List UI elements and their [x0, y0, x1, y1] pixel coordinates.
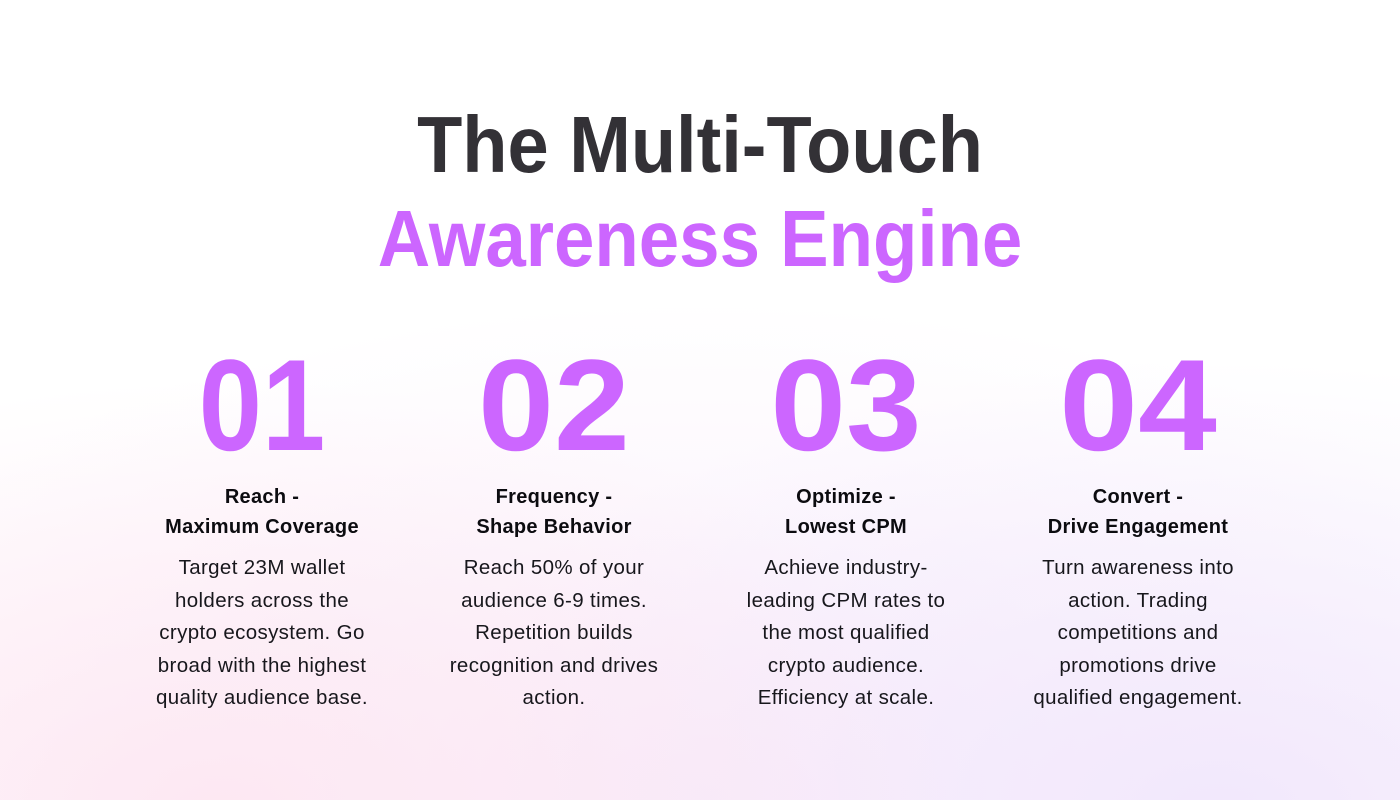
body 02: Repetition builds [475, 621, 633, 644]
heading 04 [1048, 486, 1228, 538]
title line 2: Awareness Engine [378, 194, 1022, 283]
heading 03: Lowest CPM [785, 516, 907, 538]
heading 02 [476, 486, 632, 538]
body 04: action. Trading [1068, 589, 1208, 612]
number 03: 03 [770, 332, 922, 478]
heading 04: Drive Engagement [1048, 516, 1228, 538]
column 03 [747, 332, 945, 709]
column 04 [1033, 332, 1243, 709]
heading 04: Convert - [1093, 486, 1183, 508]
body 02: Reach 50% of your [464, 556, 644, 579]
body 03: crypto audience. [768, 654, 924, 677]
body 02: recognition and drives [450, 654, 658, 677]
body 04: competitions and [1058, 621, 1218, 644]
title [378, 100, 1022, 283]
heading 03: Optimize - [796, 486, 896, 508]
heading 02: Shape Behavior [476, 516, 632, 538]
body 03: leading CPM rates to [747, 589, 945, 612]
heading 01 [165, 486, 359, 538]
body 01: quality audience base. [156, 686, 368, 709]
number 02: 02 [478, 332, 630, 478]
body 01: holders across the [175, 589, 349, 612]
heading 01: Maximum Coverage [165, 516, 359, 538]
body 03: Achieve industry- [764, 556, 928, 579]
body 04 [1033, 556, 1243, 709]
title line 1: The Multi-Touch [417, 100, 983, 189]
body 01 [156, 556, 368, 709]
body 03: Efficiency at scale. [758, 686, 934, 709]
body 01: Target 23M wallet [179, 556, 345, 579]
column 02 [450, 332, 658, 709]
body 02: audience 6-9 times. [461, 589, 647, 612]
number 01: 01 [199, 332, 325, 478]
body 04: Turn awareness into [1042, 556, 1234, 579]
body 04: promotions drive [1059, 654, 1217, 677]
body 04: qualified engagement. [1033, 686, 1243, 709]
heading 01: Reach - [225, 486, 299, 508]
body 02 [450, 556, 658, 709]
heading 02: Frequency - [496, 486, 612, 508]
body 01: crypto ecosystem. Go [159, 621, 365, 644]
number 04: 04 [1059, 332, 1217, 478]
column 01 [156, 332, 368, 709]
body 01: broad with the highest [158, 654, 366, 677]
heading 03 [785, 486, 907, 538]
body 03: the most qualified [762, 621, 930, 644]
body 02: action. [523, 686, 585, 709]
body 03 [747, 556, 945, 709]
